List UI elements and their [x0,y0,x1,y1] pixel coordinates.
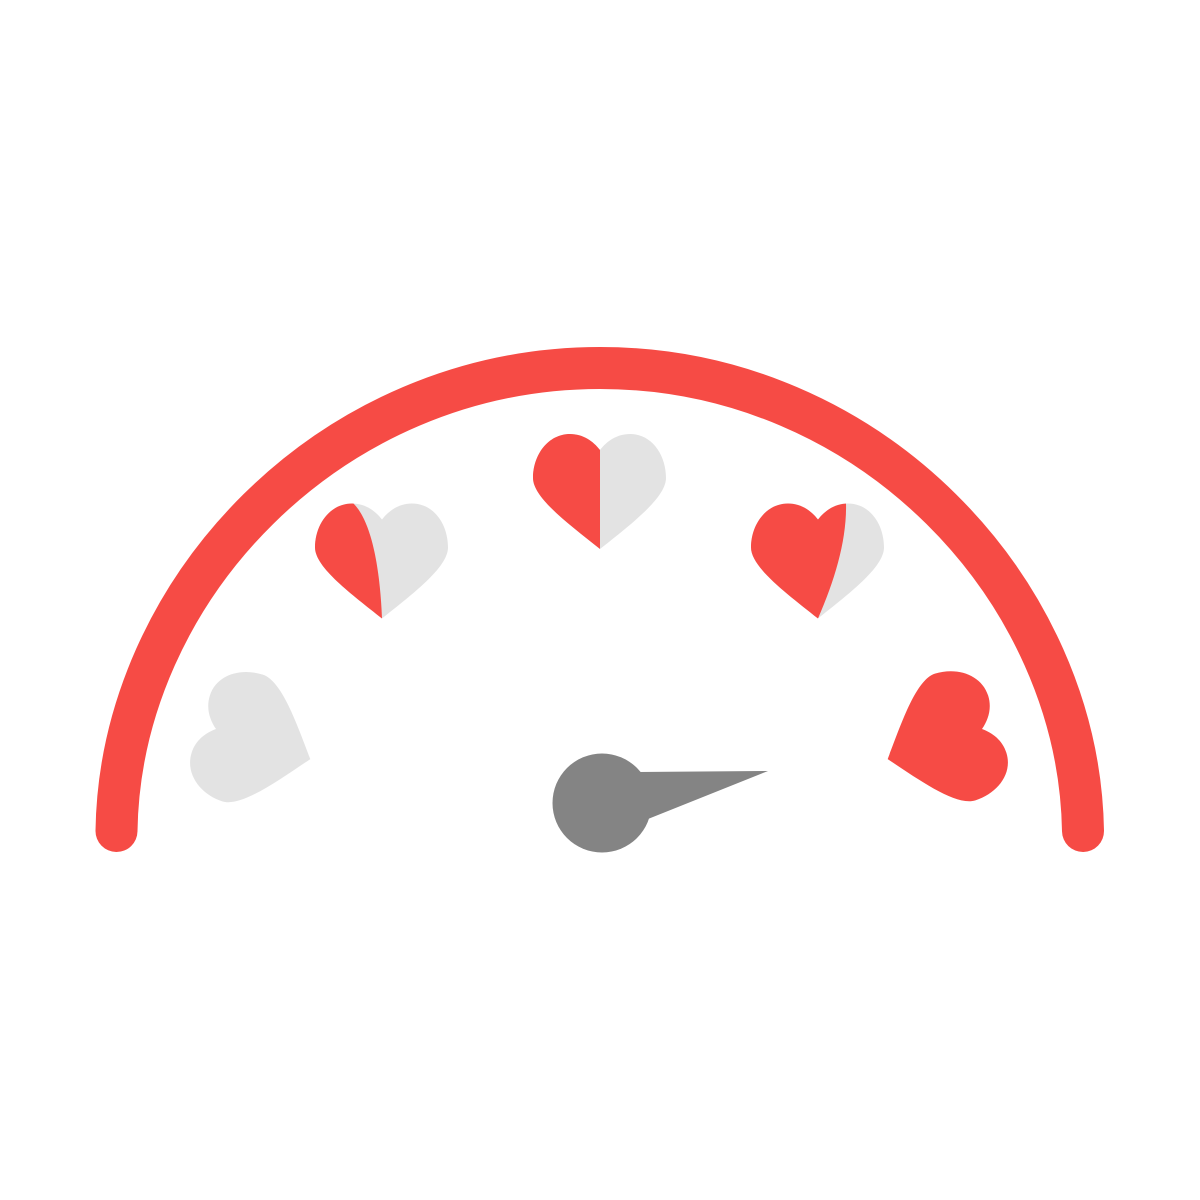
heart speedometer gauge [96,347,1104,852]
needle [552,754,768,852]
heart: quarter filled [315,504,448,618]
heart: three-quarters filled [751,504,884,618]
heart: empty, far left [180,661,330,823]
heart: half filled [533,434,666,549]
gauge arc [116,368,1083,831]
heart: full, far right [867,660,1017,822]
